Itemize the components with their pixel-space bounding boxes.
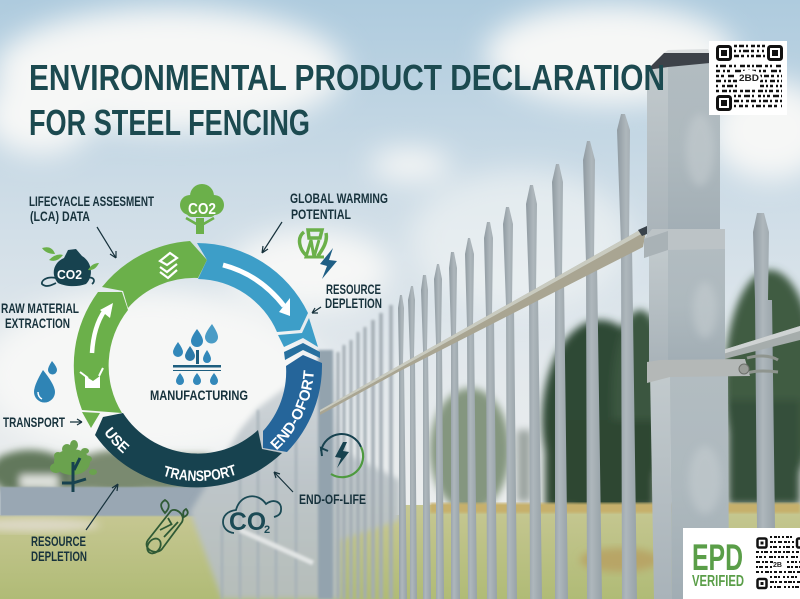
- label: global warming potential: GLOBAL WARMING: [290, 190, 388, 206]
- icon: CO2 cloud: 2: [264, 524, 270, 536]
- rail to the right: [713, 326, 800, 360]
- icon: CO2 pot with leaves: [42, 247, 99, 286]
- label: resource depletion right: RESOURCE: [326, 281, 381, 297]
- icon: log with leaves: [144, 500, 188, 556]
- ring segment: upper green: [102, 241, 207, 308]
- top rail: [320, 226, 647, 415]
- label: lifecycle assessment: [29, 193, 154, 258]
- ring segment: lower green: [74, 292, 128, 413]
- EPD verified badge: [683, 528, 800, 599]
- label: resource depletion right: DEPLETION: [325, 295, 382, 311]
- label: lifecycle assessment: LIFECYACLE ASSESMENT: [29, 193, 154, 209]
- icon: CO2 tree: CO2: [188, 201, 216, 218]
- title: [29, 57, 665, 143]
- icon: CO2 pot with leaves: CO2: [57, 267, 82, 282]
- distant pickets: [338, 305, 391, 599]
- end-of-port band label: END-OFORT: [270, 370, 314, 450]
- label: transport: TRANSPORT: [3, 414, 65, 430]
- label: resource depletion lower: DEPLETION: [31, 548, 87, 564]
- icon: CO2 cloud: [223, 496, 281, 536]
- label: lifecycle assessment: (LCA) DATA: [30, 208, 90, 224]
- title: ENVIRONMENTAL PRODUCT DECLARATION: [29, 57, 665, 98]
- label: end of life: END-OF-LIFE: [299, 491, 366, 507]
- label: raw material extraction: EXTRACTION: [5, 315, 70, 331]
- manufacturing center icon and label: [150, 324, 248, 403]
- post mottling: [686, 114, 721, 514]
- arrow: curved white arrow: [223, 265, 290, 316]
- label: raw material extraction: RAW MATERIAL: [1, 300, 79, 316]
- title: FOR STEEL FENCING: [29, 102, 310, 143]
- background: treeline and field: [0, 270, 800, 599]
- icon: water drops: [34, 361, 57, 403]
- icon: CO2 cloud: CO: [229, 508, 266, 536]
- icon: water droplets: [173, 324, 221, 385]
- label: manufacturing: MANUFACTURING: [150, 387, 248, 403]
- ring segment: end of port: [263, 355, 322, 452]
- icon: lightning bolt: [320, 248, 337, 279]
- label: raw material extraction: [1, 300, 79, 331]
- clamp rings: [747, 356, 778, 373]
- label: global warming potential: [262, 190, 388, 253]
- icon: envelope: [80, 368, 103, 388]
- transport band label: TRANSPORT: [165, 464, 234, 482]
- background: blurred far fence section: [190, 305, 400, 599]
- ring segment: small green tip: [82, 412, 100, 428]
- label: resource depletion lower: RESOURCE: [31, 533, 86, 549]
- ring chevrons: [278, 318, 320, 360]
- lifecycle ring diagram: [74, 241, 322, 488]
- QR code top right: 2BD: [739, 73, 760, 83]
- icon: trophy recycle: [300, 230, 326, 257]
- QR code in badge: 2B: [773, 562, 782, 569]
- small post: [753, 213, 775, 528]
- icon: tree: [50, 440, 97, 492]
- arrow: upward white arrow: [92, 303, 113, 353]
- ring segment: dark teal: [95, 413, 282, 488]
- upper bracket: [644, 229, 725, 258]
- icon: layered box: [160, 253, 177, 278]
- right post with brackets: [644, 49, 800, 599]
- label: resource depletion right: [312, 281, 382, 313]
- main post: [647, 66, 668, 240]
- EPD verified badge: EPD: [692, 537, 743, 578]
- icon: recycle energy: [321, 434, 363, 477]
- label: global warming potential: POTENTIAL: [291, 206, 351, 222]
- EPD verified badge: VERIFIED: [692, 573, 744, 590]
- use band label: USE: [106, 426, 130, 454]
- steel pickets: [398, 114, 637, 599]
- label: resource depletion lower: [31, 484, 118, 564]
- lower bracket: [647, 359, 750, 383]
- icon: CO2 tree: [180, 184, 224, 234]
- label: end of life: [274, 472, 366, 507]
- QR code top right: [709, 41, 787, 115]
- ring segment: light blue: [197, 243, 308, 332]
